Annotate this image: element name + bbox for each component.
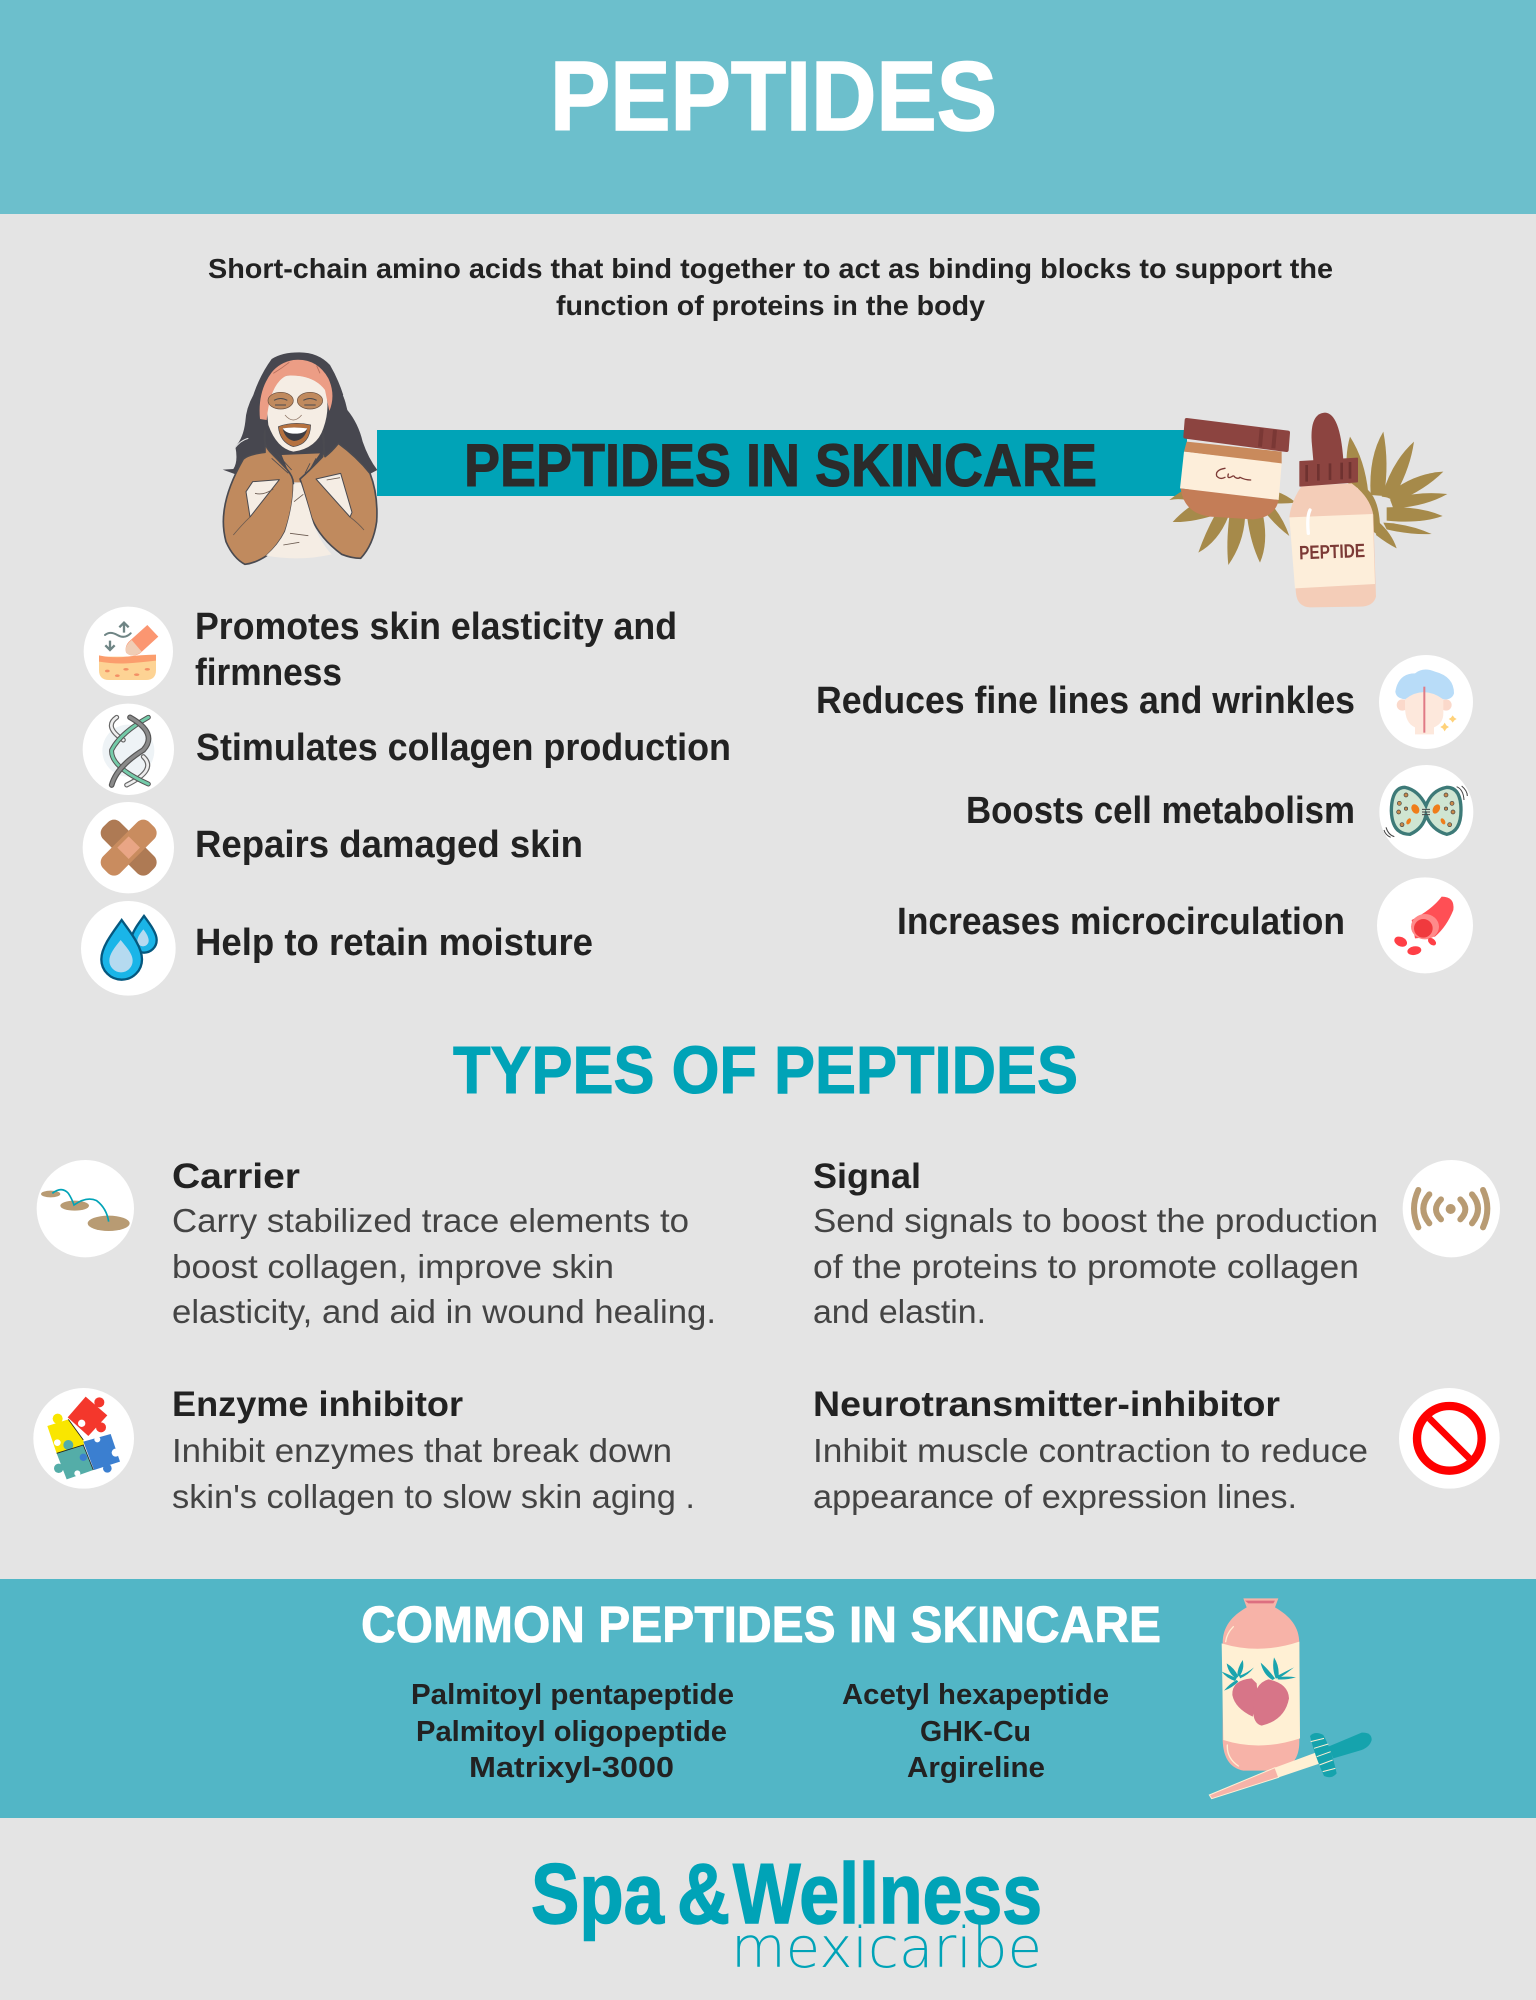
towel [266, 482, 332, 558]
list: peptides right: Argireline [907, 1752, 1045, 1784]
type: signal: and elastin. [813, 1293, 986, 1330]
type: signal: of the proteins to promote collagen [813, 1248, 1359, 1285]
benefit text left: Promotes skin elasticity and [195, 606, 677, 648]
type: neurotransmitter-inhibitor [813, 1385, 1500, 1515]
intro text [208, 253, 1333, 321]
leaves behind bottle [1347, 432, 1447, 548]
icon: skin and finger [84, 607, 173, 696]
heading: common peptides: COMMON PEPTIDES IN SKINCARE [361, 1596, 1161, 1653]
banner: peptides in skincare: PEPTIDES IN SKINCARE [464, 432, 1097, 499]
benefit text left: firmness [195, 652, 342, 694]
benefit icons left [81, 607, 176, 996]
benefit text right [816, 680, 1355, 943]
header band [0, 0, 1536, 214]
leaves behind jar [1169, 487, 1296, 565]
logo: spa and wellness mexicaribe: & [677, 1847, 730, 1942]
logo: spa and wellness mexicaribe: mexicaribe [731, 1916, 1042, 1981]
type: signal [813, 1157, 1500, 1330]
illustration: cream jar and peptide bottle: PEPTIDE [1299, 541, 1366, 564]
list: peptides right: Acetyl hexapeptide [842, 1679, 1109, 1711]
jar [1184, 442, 1282, 464]
icon: puzzle pieces [33, 1388, 134, 1489]
icon: signal waves [1403, 1160, 1500, 1257]
logo: spa and wellness mexicaribe [531, 1847, 1042, 1981]
logo: spa and wellness mexicaribe: Spa [531, 1847, 665, 1942]
type: enzyme inhibitor: Inhibit enzymes that break down [172, 1432, 672, 1469]
benefit icons right [1377, 655, 1473, 973]
benefit text left: Repairs damaged skin [195, 824, 583, 866]
type: neurotransmitter-inhibitor: Neurotransmitter-inhibitor [813, 1385, 1280, 1424]
illustration: woman with face mask [223, 352, 377, 564]
icon: crossed bandages [83, 802, 174, 893]
type: signal: Signal [813, 1157, 921, 1196]
list: peptides right: GHK-Cu [920, 1716, 1031, 1748]
type: carrier: Carrier [172, 1157, 300, 1196]
panel: common peptides [0, 1579, 1536, 1818]
type: carrier: boost collagen, improve skin [172, 1248, 614, 1285]
intro text: function of proteins in the body [556, 290, 985, 321]
icon: face [1379, 655, 1473, 749]
benefit text right: Reduces fine lines and wrinkles [816, 680, 1355, 722]
icon: prohibition sign [1399, 1388, 1500, 1489]
benefit text left: Help to retain moisture [195, 922, 593, 964]
list: peptides left [411, 1679, 734, 1784]
benefit text right: Boosts cell metabolism [966, 790, 1355, 832]
type: neurotransmitter-inhibitor: Inhibit muscle contraction to reduce [813, 1432, 1368, 1469]
list: peptides right [842, 1679, 1109, 1784]
logo: spa and wellness mexicaribe: Wellness [733, 1847, 1042, 1942]
type: carrier [37, 1157, 716, 1330]
icon: synapse cell [1379, 765, 1473, 859]
benefit text left: Stimulates collagen production [196, 727, 731, 769]
heading: types of peptides: TYPES OF PEPTIDES [453, 1033, 1078, 1108]
benefit text left [195, 606, 731, 964]
type: enzyme inhibitor: skin's collagen to slow skin aging . [172, 1478, 695, 1515]
title: PEPTIDES [550, 41, 997, 151]
icon: carrier path [37, 1160, 134, 1257]
intro text: Short-chain amino acids that bind together to act as binding blocks to support the [208, 253, 1333, 284]
bottle [1289, 483, 1376, 607]
type: carrier: elasticity, and aid in wound healing. [172, 1293, 716, 1330]
type: enzyme inhibitor: Enzyme inhibitor [172, 1385, 463, 1424]
benefits left column [81, 606, 731, 996]
icon: dna [83, 704, 174, 795]
illustration: cream jar and peptide bottle [1169, 413, 1447, 607]
list: peptides left: Matrixyl-3000 [469, 1752, 674, 1784]
icon: water drops [81, 901, 176, 996]
benefit text right: Increases microcirculation [897, 901, 1345, 943]
illustration: strawberry serum bottle and dropper [1209, 1598, 1372, 1799]
type: enzyme inhibitor [33, 1385, 695, 1515]
type: carrier: Carry stabilized trace elements to [172, 1202, 689, 1239]
type: signal: Send signals to boost the production [813, 1202, 1378, 1239]
icon: blood vessel [1377, 877, 1473, 973]
type: neurotransmitter-inhibitor: appearance of expression lines. [813, 1478, 1297, 1515]
list: peptides left: Palmitoyl oligopeptide [416, 1716, 727, 1748]
list: peptides left: Palmitoyl pentapeptide [411, 1679, 734, 1711]
benefits right column [816, 655, 1473, 973]
